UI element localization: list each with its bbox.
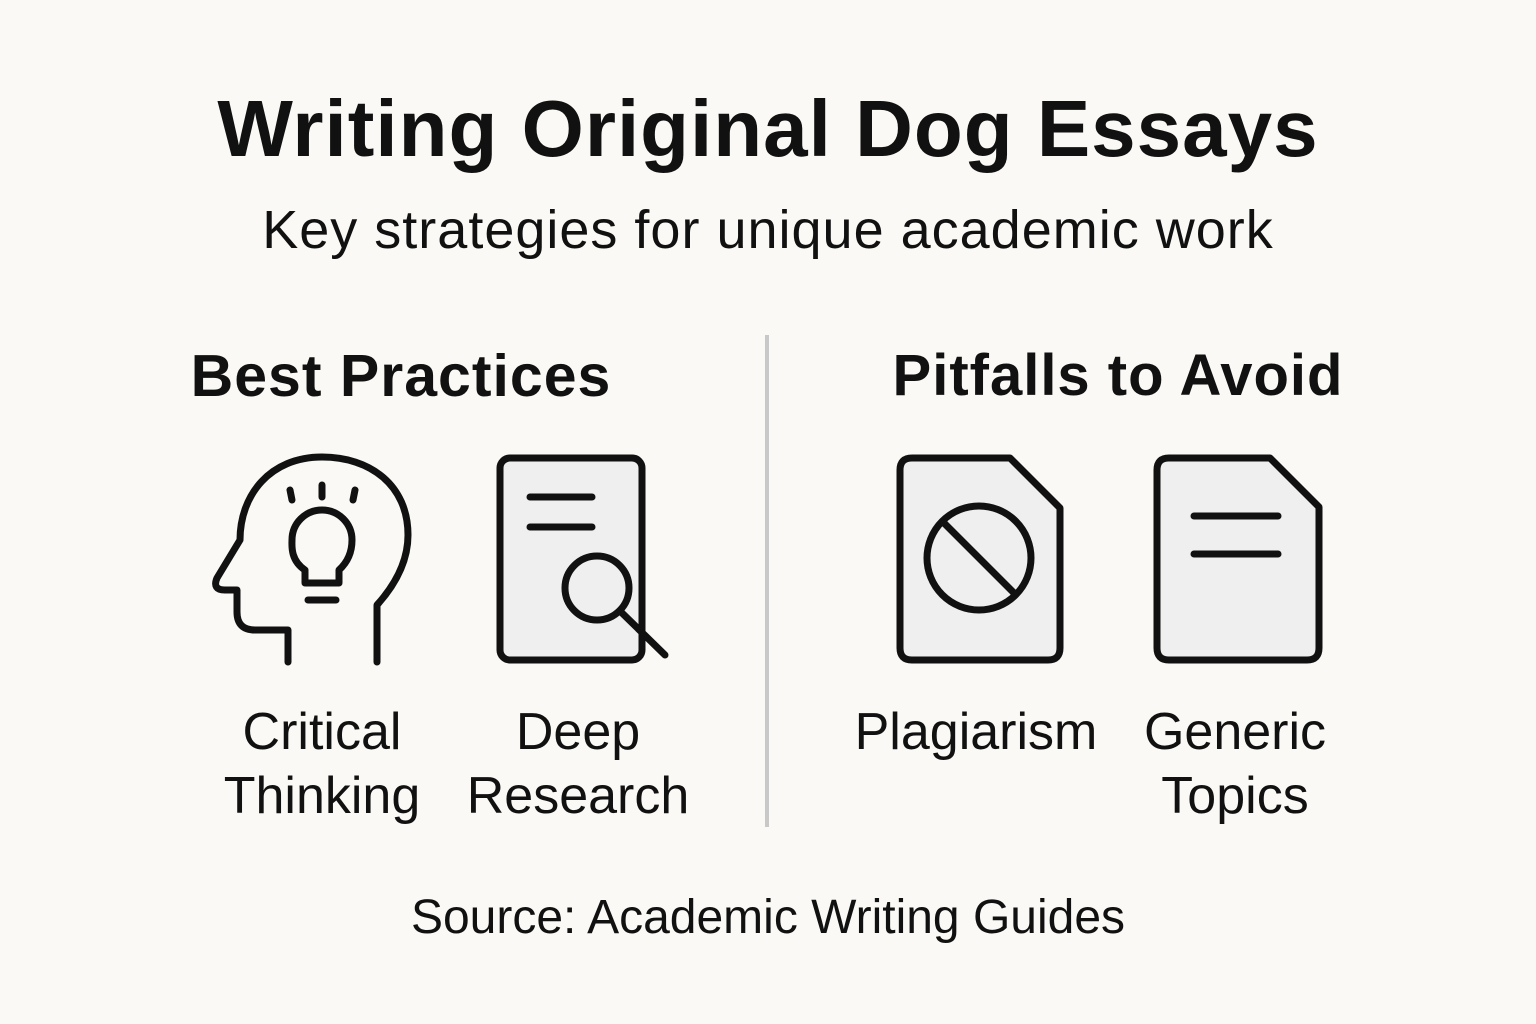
label: critical thinking: Critical: [243, 703, 401, 761]
label: deep research: [467, 703, 689, 825]
icon: document with magnifier: [500, 458, 665, 660]
label: deep research: Deep: [516, 703, 640, 761]
icon: generic document: [1157, 458, 1319, 660]
subtitle: Key strategies for unique academic work: [262, 200, 1274, 260]
label: plagiarism: Plagiarism: [855, 703, 1097, 761]
heading: best practices: Best Practices: [191, 343, 611, 409]
label: generic topics: Topics: [1161, 767, 1309, 825]
label: deep research: Research: [467, 767, 689, 825]
label: generic topics: Generic: [1144, 703, 1326, 761]
source: Source: Academic Writing Guides: [411, 891, 1125, 944]
icon: plagiarism document: [900, 458, 1060, 660]
label: critical thinking: Thinking: [224, 767, 420, 825]
icon: head with lightbulb: [216, 457, 408, 662]
title: Writing Original Dog Essays: [217, 84, 1319, 173]
label: generic topics: [1144, 703, 1326, 825]
heading: pitfalls: Pitfalls to Avoid: [893, 343, 1343, 408]
divider: [765, 335, 769, 827]
label: critical thinking: [224, 703, 420, 825]
